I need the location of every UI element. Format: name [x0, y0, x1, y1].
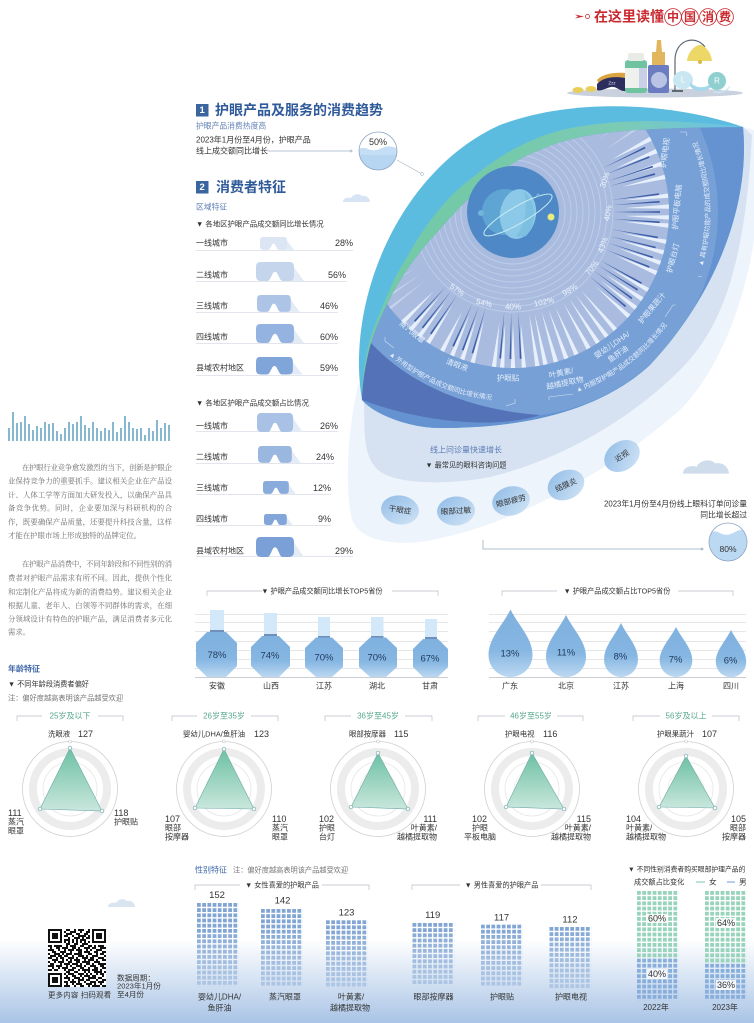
- cloud: right: [683, 460, 729, 474]
- callout: 50%: 50%: [369, 137, 387, 147]
- QR caption: 更多内容 扫码观看: [48, 990, 111, 1000]
- radar: 26岁至35岁: 110: [272, 814, 286, 824]
- chart: male favourite products: 117: [494, 912, 509, 924]
- chart: regional share goggles: 29%: [335, 546, 353, 556]
- radar: 56岁及以上: 105: [731, 814, 746, 824]
- data period: 数据周期：: [117, 972, 155, 982]
- text block: commentary: 根据儿童、老年人、白领等不同群体的需求，在细: [8, 601, 173, 611]
- chart: regional share goggles: [196, 413, 353, 557]
- chart: eye fan of product growth: [358, 106, 744, 428]
- radar: 25岁及以下: [8, 710, 138, 836]
- chart: growth top5 provinces: 74%: [260, 650, 280, 662]
- radar: 56岁及以上: 按摩器: [722, 832, 746, 842]
- text block: commentary: 计、人体工学等方面加大研发投入，以确保产品具: [8, 490, 173, 500]
- chart: gender share change: 2023年: [712, 1002, 738, 1012]
- chart: female favourite products: ▼ 女性喜爱的护眼产品: [245, 880, 319, 890]
- decorative equalizer bars: [9, 412, 169, 441]
- chart: gender share change: 2022年: [643, 1002, 669, 1012]
- consultation bubbles: 眼部疲劳: [495, 492, 527, 509]
- chart: share top5 provinces: ▼ 护眼产品成交额占比TOP5省份: [564, 586, 670, 596]
- chart: regional growth goggles: 60%: [320, 332, 338, 342]
- text block: commentary: 需求。: [8, 628, 30, 636]
- fan values: 40%: [602, 204, 614, 222]
- radar: 25岁及以下: 洗眼液: [48, 730, 71, 738]
- chart: growth top5 provinces: 山西: [263, 680, 279, 690]
- text block: commentary: 和定制化产品将成为新的消费趋势。建议相关企业: [8, 588, 173, 596]
- curved captions: [384, 132, 710, 406]
- chart: regional growth goggles: 县域农村地区: [196, 362, 244, 372]
- radar: 46岁至55岁: 115: [577, 814, 591, 824]
- radar: 26岁至35岁: 眼罩: [272, 832, 288, 842]
- chart: male favourite products: 护眼电视: [555, 992, 587, 1002]
- chart: gender share change: 40%: [648, 969, 666, 979]
- rim product labels: 护眼果蔬汁: [636, 290, 668, 325]
- callout: 80%: 同比增长超过: [700, 510, 747, 520]
- rim product labels: 清眼液: [445, 356, 470, 373]
- radar: 25岁及以下: 蒸汽: [8, 816, 24, 826]
- chart: share top5 provinces: 广东: [502, 680, 518, 690]
- illustration: eye-care products on a shelf: L: [681, 76, 686, 84]
- chart: regional growth goggles: 二线城市: [196, 270, 228, 280]
- chart: growth top5 provinces: 67%: [420, 654, 440, 664]
- fan values: 40%: [505, 302, 521, 312]
- radar: 56岁及以上: 眼部: [730, 822, 746, 832]
- chart: female favourite products: 越橘提取物: [330, 1002, 370, 1012]
- icon: planet pupil: [467, 166, 559, 258]
- chart: regional growth goggles: 59%: [320, 363, 338, 373]
- fan values: 70%: [583, 259, 601, 277]
- rim product labels: 叶黄素/: [548, 365, 575, 380]
- pale eye shadow band: [348, 127, 754, 543]
- chart: share top5 provinces: 6%: [724, 656, 738, 666]
- cloud: upper: [343, 194, 370, 202]
- data period: [117, 972, 161, 999]
- curved captions: ▲ 内服型护眼产品成交额同比增长情况: [578, 322, 667, 392]
- radar: 25岁及以下: 25岁及以下: [50, 710, 90, 720]
- chart: gender share change: 60%: [648, 914, 666, 924]
- chart: regional growth goggles: 56%: [328, 270, 346, 280]
- rim product labels: 护眼平板电脑: [670, 183, 684, 230]
- radar: 36岁至45岁: 叶黄素/: [411, 822, 438, 832]
- chart: gender share change: [628, 864, 747, 1012]
- chart: growth top5 provinces: 70%: [314, 652, 334, 664]
- section 1 heading: 护眼产品及服务的消费趋势: [215, 102, 383, 118]
- radar: 46岁至55岁: 叶黄素/: [565, 822, 592, 832]
- fan values: 54%: [475, 297, 493, 309]
- chart: share top5 provinces: 7%: [669, 654, 683, 666]
- chart: male favourite products: 119: [425, 910, 440, 921]
- age heading: [8, 664, 123, 702]
- fan values: [448, 171, 614, 312]
- chart: share top5 provinces: [488, 586, 746, 690]
- radar: 26岁至35岁: 按摩器: [165, 832, 189, 842]
- chart: gender share change: 64%: [717, 918, 735, 928]
- chart: female favourite products: 142: [275, 896, 290, 906]
- rim product labels: 蒸汽眼罩: [397, 318, 427, 345]
- chart: female favourite products: 婴幼儿DHA/: [198, 992, 242, 1002]
- chart: share top5 provinces: 13%: [500, 648, 520, 660]
- radar: 26岁至35岁: 123: [254, 729, 269, 739]
- gender heading: 性别特征: [195, 864, 227, 874]
- radar: 36岁至45岁: 115: [394, 729, 408, 739]
- radar: 26岁至35岁: 婴幼儿DHA/鱼肝油: [183, 730, 245, 738]
- rim product labels: 越橘提取物: [545, 374, 585, 391]
- chart: growth top5 provinces: ▼ 护眼产品成交额同比增长TOP5省份: [261, 586, 383, 596]
- radar: 56岁及以上: 叶黄素/: [626, 822, 653, 832]
- chart: regional growth goggles: [196, 237, 353, 376]
- chart title: regional growth: ▼ 各地区护眼产品成交额同比增长情况: [196, 220, 324, 228]
- chart: gender share change: 女: [709, 876, 717, 886]
- rim product labels: 护眼台灯: [664, 242, 681, 274]
- chart: regional share goggles: 二线城市: [196, 452, 228, 462]
- fan values: 43%: [596, 236, 610, 254]
- radar: 46岁至55岁: 平板电脑: [464, 832, 496, 842]
- radar: 46岁至55岁: 46岁至55岁: [510, 710, 552, 720]
- text block: commentary: 备竞争优势。同时，企业要加深与科研机构的合: [8, 504, 173, 514]
- chart: share top5 provinces: 上海: [668, 680, 684, 690]
- text block: commentary: 业保持竞争力的重要抓手。建议相关企业在产品设: [8, 476, 173, 486]
- section 1 heading: 1: [200, 105, 206, 116]
- callout: 80%: 2023年1月份至4月份线上眼科订单问诊量: [604, 498, 747, 508]
- consultation bubbles: 近视: [613, 447, 631, 464]
- data period: 2023年1月份: [117, 980, 161, 990]
- text: consumption heat: [196, 120, 352, 156]
- section 2 heading: 2: [200, 182, 205, 193]
- chart: male favourite products: 眼部按摩器: [414, 992, 454, 1002]
- radar: 36岁至45岁: 护眼: [319, 822, 335, 832]
- header: 在这里读懂中国消费: 费: [719, 9, 731, 24]
- text block: commentary: 在护眼产品消费中，不同年龄段和不同性别的消: [22, 560, 172, 570]
- gender heading: 注：偏好度越高表明该产品越受欢迎: [233, 866, 348, 874]
- chart: male favourite products: [412, 880, 591, 1002]
- rim product labels: 鱼肝油: [606, 343, 630, 364]
- header: 在这里读懂中国消费: 国: [684, 10, 696, 24]
- callout: 80%: [483, 498, 752, 565]
- radar: 46岁至55岁: 102: [472, 814, 487, 824]
- radar: 26岁至35岁: 蒸汽: [272, 822, 288, 832]
- callout: 80%: 80%: [719, 544, 737, 554]
- chart: male favourite products: 112: [562, 914, 578, 926]
- chart: share top5 provinces: 北京: [558, 680, 574, 690]
- chart: female favourite products: 123: [339, 908, 354, 918]
- radar: 26岁至35岁: 26岁至35岁: [203, 710, 245, 720]
- text block: commentary: 分领域设计有特色的护眼产品，满足消费者多元化: [8, 614, 173, 624]
- header: 在这里读懂中国消费: 在这里读懂: [594, 8, 664, 24]
- text: consumption heat: 护眼产品消费热度高: [196, 120, 266, 130]
- rim product labels: 婴幼儿DHA/: [592, 328, 632, 360]
- eye shadow inner band: [364, 127, 752, 482]
- chart: regional share goggles: 三线城市: [196, 482, 228, 492]
- curved captions: ▲ 外用型护眼产品成交额同比增长情况: [390, 354, 492, 400]
- radar: 26岁至35岁: 眼部: [165, 822, 181, 832]
- chart: regional share goggles: 26%: [320, 421, 338, 431]
- radar: 36岁至45岁: 36岁至45岁: [357, 710, 399, 720]
- online consultation heading: 线上问诊量快速增长: [430, 444, 502, 454]
- chart: growth top5 provinces: [195, 586, 448, 690]
- radar: 25岁及以下: 118: [114, 808, 128, 818]
- chart: growth top5 provinces: 江苏: [316, 680, 332, 690]
- chart: gender share change: 男: [739, 878, 747, 886]
- consultation bubbles: [379, 433, 646, 527]
- text block: commentary: 作，既要确保产品质量，还要提升科技含量，这样: [8, 518, 173, 528]
- text: consumption heat: 2023年1月份至4月份，护眼产品: [196, 134, 311, 144]
- curved captions: ▲ 具有护眼功能产品的成交额同比增长情况: [692, 142, 710, 265]
- radar: 36岁至45岁: 越橘提取物: [397, 832, 437, 842]
- chart: regional share goggles: 一线城市: [196, 420, 228, 430]
- radar: 46岁至55岁: 越橘提取物: [551, 832, 591, 842]
- radar: 36岁至45岁: 眼部按摩器: [349, 730, 387, 738]
- text block: commentary: 才能在护眼市场上形成独特的品牌定位。: [8, 531, 141, 540]
- chart: regional growth goggles: 28%: [335, 238, 353, 248]
- radar: 56岁及以上: 107: [702, 729, 717, 739]
- text block: commentary: [8, 463, 173, 636]
- cloud: lower left: [108, 899, 135, 907]
- consultation bubbles: 结膜炎: [553, 475, 579, 494]
- radar: 25岁及以下: 护眼贴: [114, 816, 138, 826]
- rim product labels: 护眼电视: [657, 137, 672, 169]
- fan values: 102%: [533, 295, 555, 309]
- text block: commentary: 费者对护眼产品需求有所不同。因此，提供个性化: [8, 574, 173, 584]
- chart: gender share change: 36%: [717, 980, 735, 990]
- chart: share top5 provinces: 江苏: [613, 680, 629, 690]
- data period: 至4月份: [117, 989, 144, 999]
- chart: growth top5 provinces: 湖北: [369, 682, 385, 690]
- radar: 26岁至35岁: [165, 710, 288, 842]
- radar: 46岁至55岁: [464, 710, 592, 842]
- chart title: regional share: ▼ 各地区护眼产品成交额占比情况: [196, 398, 309, 408]
- chart: female favourite products: [195, 880, 370, 1012]
- chart: female favourite products: 叶黄素/: [338, 992, 365, 1002]
- chart: growth top5 provinces: 甘肃: [422, 680, 438, 690]
- radar: 36岁至45岁: [319, 710, 438, 842]
- illustration: eye-care products on a shelf: [567, 40, 743, 98]
- radar: 56岁及以上: [626, 710, 746, 842]
- callout: 50%: [355, 132, 423, 175]
- consultation bubbles: 眼部过敏: [440, 504, 472, 517]
- online consultation heading: [426, 444, 506, 470]
- chart: regional share goggles: 四线城市: [196, 514, 228, 524]
- text: consumption heat: 线上成交额同比增长: [196, 146, 268, 156]
- age heading: 注：偏好度越高表明该产品越受欢迎: [8, 694, 123, 702]
- radar: 36岁至45岁: 102: [319, 814, 334, 824]
- fan values: 30%: [598, 171, 612, 189]
- chart: regional share goggles: 24%: [316, 452, 334, 462]
- chart: female favourite products: 152: [209, 890, 225, 901]
- radar: 56岁及以上: 104: [626, 814, 641, 824]
- chart: regional growth goggles: 一线城市: [196, 238, 228, 248]
- chart: female favourite products: 鱼肝油: [208, 1002, 232, 1012]
- radar: 36岁至45岁: 111: [423, 814, 437, 824]
- chart: gender share change: ▼ 不同性别消费者购买眼部护理产品的: [628, 864, 746, 874]
- illustration: eye-care products on a shelf: Zzz: [608, 80, 616, 86]
- radar: 56岁及以上: 56岁及以上: [666, 710, 706, 720]
- radar: 36岁至45岁: 台灯: [319, 832, 335, 842]
- illustration: eye-care products on a shelf: R: [714, 76, 720, 86]
- chart: growth top5 provinces: 70%: [367, 652, 387, 664]
- subheading: region: 区域特征: [196, 202, 227, 212]
- gender heading: [195, 864, 348, 874]
- chart: regional share goggles: 12%: [313, 483, 331, 493]
- fan values: 57%: [448, 282, 466, 298]
- rim product labels: [397, 137, 684, 391]
- rim product labels: 护眼贴: [497, 372, 520, 382]
- online consultation heading: ▼ 最常见的眼科咨询问题: [426, 460, 506, 470]
- chart: growth top5 provinces: 78%: [207, 650, 227, 661]
- header: 在这里读懂中国消费: 消: [702, 9, 714, 24]
- age heading: 年龄特征: [8, 664, 40, 674]
- chart: male favourite products: ▼ 男性喜爱的护眼产品: [465, 880, 538, 890]
- chart: regional share goggles: 9%: [318, 514, 331, 524]
- chart: male favourite products: 护眼贴: [490, 992, 514, 1002]
- radar: 25岁及以下: 127: [78, 729, 93, 739]
- chart: regional growth goggles: 四线城市: [196, 332, 228, 342]
- radar: 26岁至35岁: 107: [165, 814, 180, 824]
- radar: 46岁至55岁: 116: [543, 729, 557, 739]
- chart: share top5 provinces: 11%: [557, 648, 576, 658]
- chart: female favourite products: 蒸汽眼罩: [269, 992, 301, 1002]
- radar: 46岁至55岁: 护眼: [472, 822, 488, 832]
- chart: gender share change: 成交额占比变化: [634, 878, 684, 886]
- text block: commentary: 在护眼行业竞争愈发激烈的当下，创新是护眼企: [22, 463, 173, 473]
- chart: share top5 provinces: 8%: [614, 652, 628, 662]
- fan values: 98%: [561, 282, 579, 298]
- radar: 25岁及以下: 眼罩: [8, 826, 24, 836]
- QR code: [48, 929, 106, 987]
- chart: regional growth goggles: 46%: [320, 301, 338, 311]
- consultation bubbles: 干眼症: [388, 503, 412, 516]
- radar: 56岁及以上: 越橘提取物: [626, 832, 666, 842]
- radar: 56岁及以上: 护眼果蔬汁: [657, 730, 695, 738]
- chart: regional share goggles: 县域农村地区: [196, 546, 244, 556]
- radar: 25岁及以下: 111: [8, 808, 22, 818]
- chart: growth top5 provinces: 安徽: [209, 680, 225, 690]
- header: 在这里读懂中国消费: [575, 8, 733, 25]
- section 2 heading: 消费者特征: [216, 179, 286, 195]
- radar: 46岁至55岁: 护眼电视: [505, 730, 535, 738]
- chart: regional growth goggles: 三线城市: [196, 300, 228, 310]
- header: 在这里读懂中国消费: 中: [667, 9, 679, 24]
- chart: share top5 provinces: 四川: [723, 682, 739, 690]
- age heading: ▼ 不同年龄段消费者偏好: [8, 680, 89, 688]
